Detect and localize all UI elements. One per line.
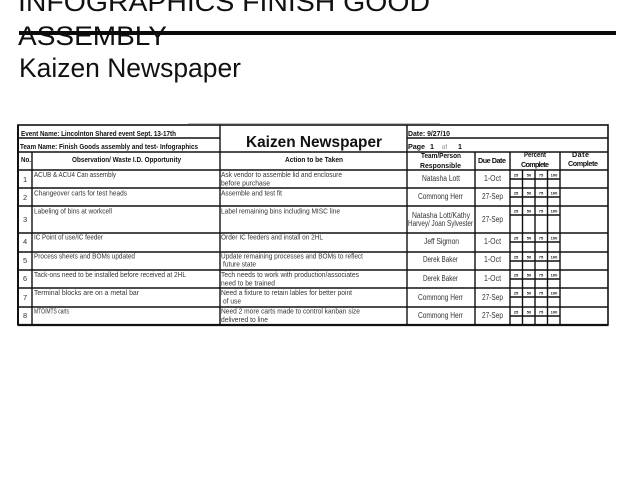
actions column: Need 2 more carts made to control kanban size: [221, 306, 360, 316]
due date column: 27-Sep: [482, 311, 503, 320]
percent complete labels: 50: [527, 310, 532, 314]
actions column: Update remaining processes and BOMs to reflect: [221, 252, 363, 260]
event information: Team Name: Finish Goods assembly and test- Infographics: [20, 142, 198, 151]
percent complete labels: 75: [539, 172, 544, 178]
row numbers: 4: [23, 237, 27, 246]
slide title: [18, 0, 430, 83]
percent complete labels: 100: [551, 272, 558, 278]
actions column: Ask vendor to assemble lid and enclosure: [221, 170, 342, 179]
percent complete labels: 75: [539, 310, 544, 314]
percent complete labels: 25: [514, 290, 519, 296]
percent complete labels: 25: [514, 172, 519, 178]
percent complete labels: [514, 172, 558, 314]
actions column: Label remaining bins including MISC line: [221, 206, 340, 216]
column headers: [21, 150, 598, 170]
date and page: 1: [430, 142, 434, 151]
column headers: Action to be Taken: [285, 155, 343, 164]
due date column: 27-Sep: [482, 215, 503, 224]
percent complete labels: 50: [527, 254, 532, 260]
date and page: of: [442, 145, 447, 151]
observations column: Terminal blocks are on a metal bar: [34, 288, 139, 297]
percent complete labels: 75: [539, 272, 544, 278]
percent complete labels: 100: [551, 254, 558, 260]
actions column: Assemble and test fit: [221, 188, 282, 198]
percent complete labels: 50: [527, 190, 532, 196]
row numbers: 3: [23, 215, 27, 224]
responsible column: Derek Baker: [423, 255, 458, 264]
actions column: need to be trained: [221, 278, 275, 288]
date and page: Page: [408, 142, 425, 151]
percent complete labels: 50: [527, 236, 532, 240]
observations column: MTO/MTS carts: [34, 306, 69, 316]
responsible column: Harvey/ Joan Sylvester: [408, 219, 473, 228]
percent complete labels: 75: [539, 190, 544, 196]
table grid: [18, 124, 608, 325]
percent complete labels: 25: [514, 236, 519, 240]
percent complete labels: 50: [527, 290, 532, 296]
responsible column: Commong Herr: [418, 311, 463, 320]
percent complete labels: 100: [551, 208, 558, 214]
actions column: of use: [223, 296, 241, 306]
slide title: Kaizen Newspaper: [19, 53, 241, 83]
row numbers: 8: [23, 311, 27, 320]
row numbers: 7: [23, 293, 27, 302]
actions column: [221, 170, 363, 324]
due date column: 1-Oct: [484, 274, 502, 283]
percent complete labels: 50: [527, 172, 532, 178]
slide title: ASSEMBLY: [18, 21, 167, 51]
observations column: Tack-ons need to be installed before received at 2HL: [34, 270, 186, 279]
responsible column: Derek Baker: [423, 274, 458, 283]
percent complete labels: 25: [514, 254, 519, 260]
row numbers: 1: [23, 175, 27, 184]
observations column: Labeling of bins at workcell: [34, 206, 112, 216]
responsible column: Jeff Sigmon: [424, 237, 459, 246]
column headers: Responsible: [420, 161, 461, 170]
observations column: Process sheets and BOMs updated: [34, 252, 135, 260]
percent complete labels: 25: [514, 190, 519, 196]
percent complete labels: 50: [527, 208, 532, 214]
percent complete labels: 25: [514, 310, 519, 314]
column headers: Percent: [524, 150, 546, 159]
due date column: 1-Oct: [484, 255, 502, 264]
due date column: 27-Sep: [482, 293, 503, 302]
column headers: Observation/ Waste I.D. Opportunity: [72, 155, 181, 164]
percent complete labels: 100: [551, 310, 558, 314]
column headers: Team/Person: [421, 151, 461, 160]
actions column: Need a fixture to retain lables for better point: [221, 288, 352, 297]
percent complete labels: 100: [551, 172, 558, 178]
percent complete labels: 100: [551, 236, 558, 240]
percent complete labels: 75: [539, 254, 544, 260]
percent complete labels: 25: [514, 208, 519, 214]
row numbers: 2: [23, 193, 27, 202]
row numbers: [23, 175, 27, 320]
title rule: [19, 31, 616, 35]
due date column: 27-Sep: [482, 192, 503, 201]
form heading: Kaizen Newspaper: [246, 134, 382, 151]
observations column: [34, 170, 186, 316]
responsible column: [408, 174, 473, 320]
due date column: [482, 174, 503, 320]
percent complete labels: 75: [539, 208, 544, 214]
responsible column: Natasha Lott: [422, 174, 461, 183]
due date column: 1-Oct: [484, 237, 502, 246]
percent complete labels: 50: [527, 272, 532, 278]
observations column: ACUB & ACU4 Can assembly: [34, 170, 116, 179]
column headers: Complete: [568, 159, 598, 168]
percent complete labels: 75: [539, 290, 544, 296]
actions column: Tech needs to work with production/associates: [221, 270, 359, 279]
percent complete labels: 25: [514, 272, 519, 278]
percent complete labels: 75: [539, 236, 544, 240]
row numbers: 5: [23, 256, 27, 265]
observations column: Changeover carts for test heads: [34, 188, 127, 198]
kaizen newspaper table: [18, 124, 608, 325]
date and page: [408, 129, 462, 151]
percent complete labels: 100: [551, 190, 558, 196]
actions column: delivered to line: [221, 315, 268, 324]
column headers: Complete: [521, 160, 549, 169]
percent complete labels: 100: [551, 290, 558, 296]
column headers: Date: [572, 150, 589, 159]
date and page: 1: [458, 142, 462, 151]
actions column: future state: [223, 260, 256, 268]
due date column: 1-Oct: [484, 174, 502, 183]
actions column: Order IC feeders and install on 2HL: [221, 232, 323, 242]
responsible column: Natasha Lott/Kathy: [412, 211, 470, 220]
column headers: No.: [21, 155, 31, 164]
row numbers: 6: [23, 274, 27, 283]
responsible column: Commong Herr: [418, 192, 463, 201]
event information: Event Name: Lincolnton Shared event Sept. 13-17th: [21, 129, 176, 138]
responsible column: Commong Herr: [418, 293, 463, 302]
column headers: Due Date: [478, 156, 506, 165]
observations column: IC Point of use/IC feeder: [34, 232, 103, 242]
actions column: before purchase: [221, 178, 270, 188]
date and page: Date: 9/27/10: [408, 129, 450, 138]
event information: [20, 129, 198, 151]
